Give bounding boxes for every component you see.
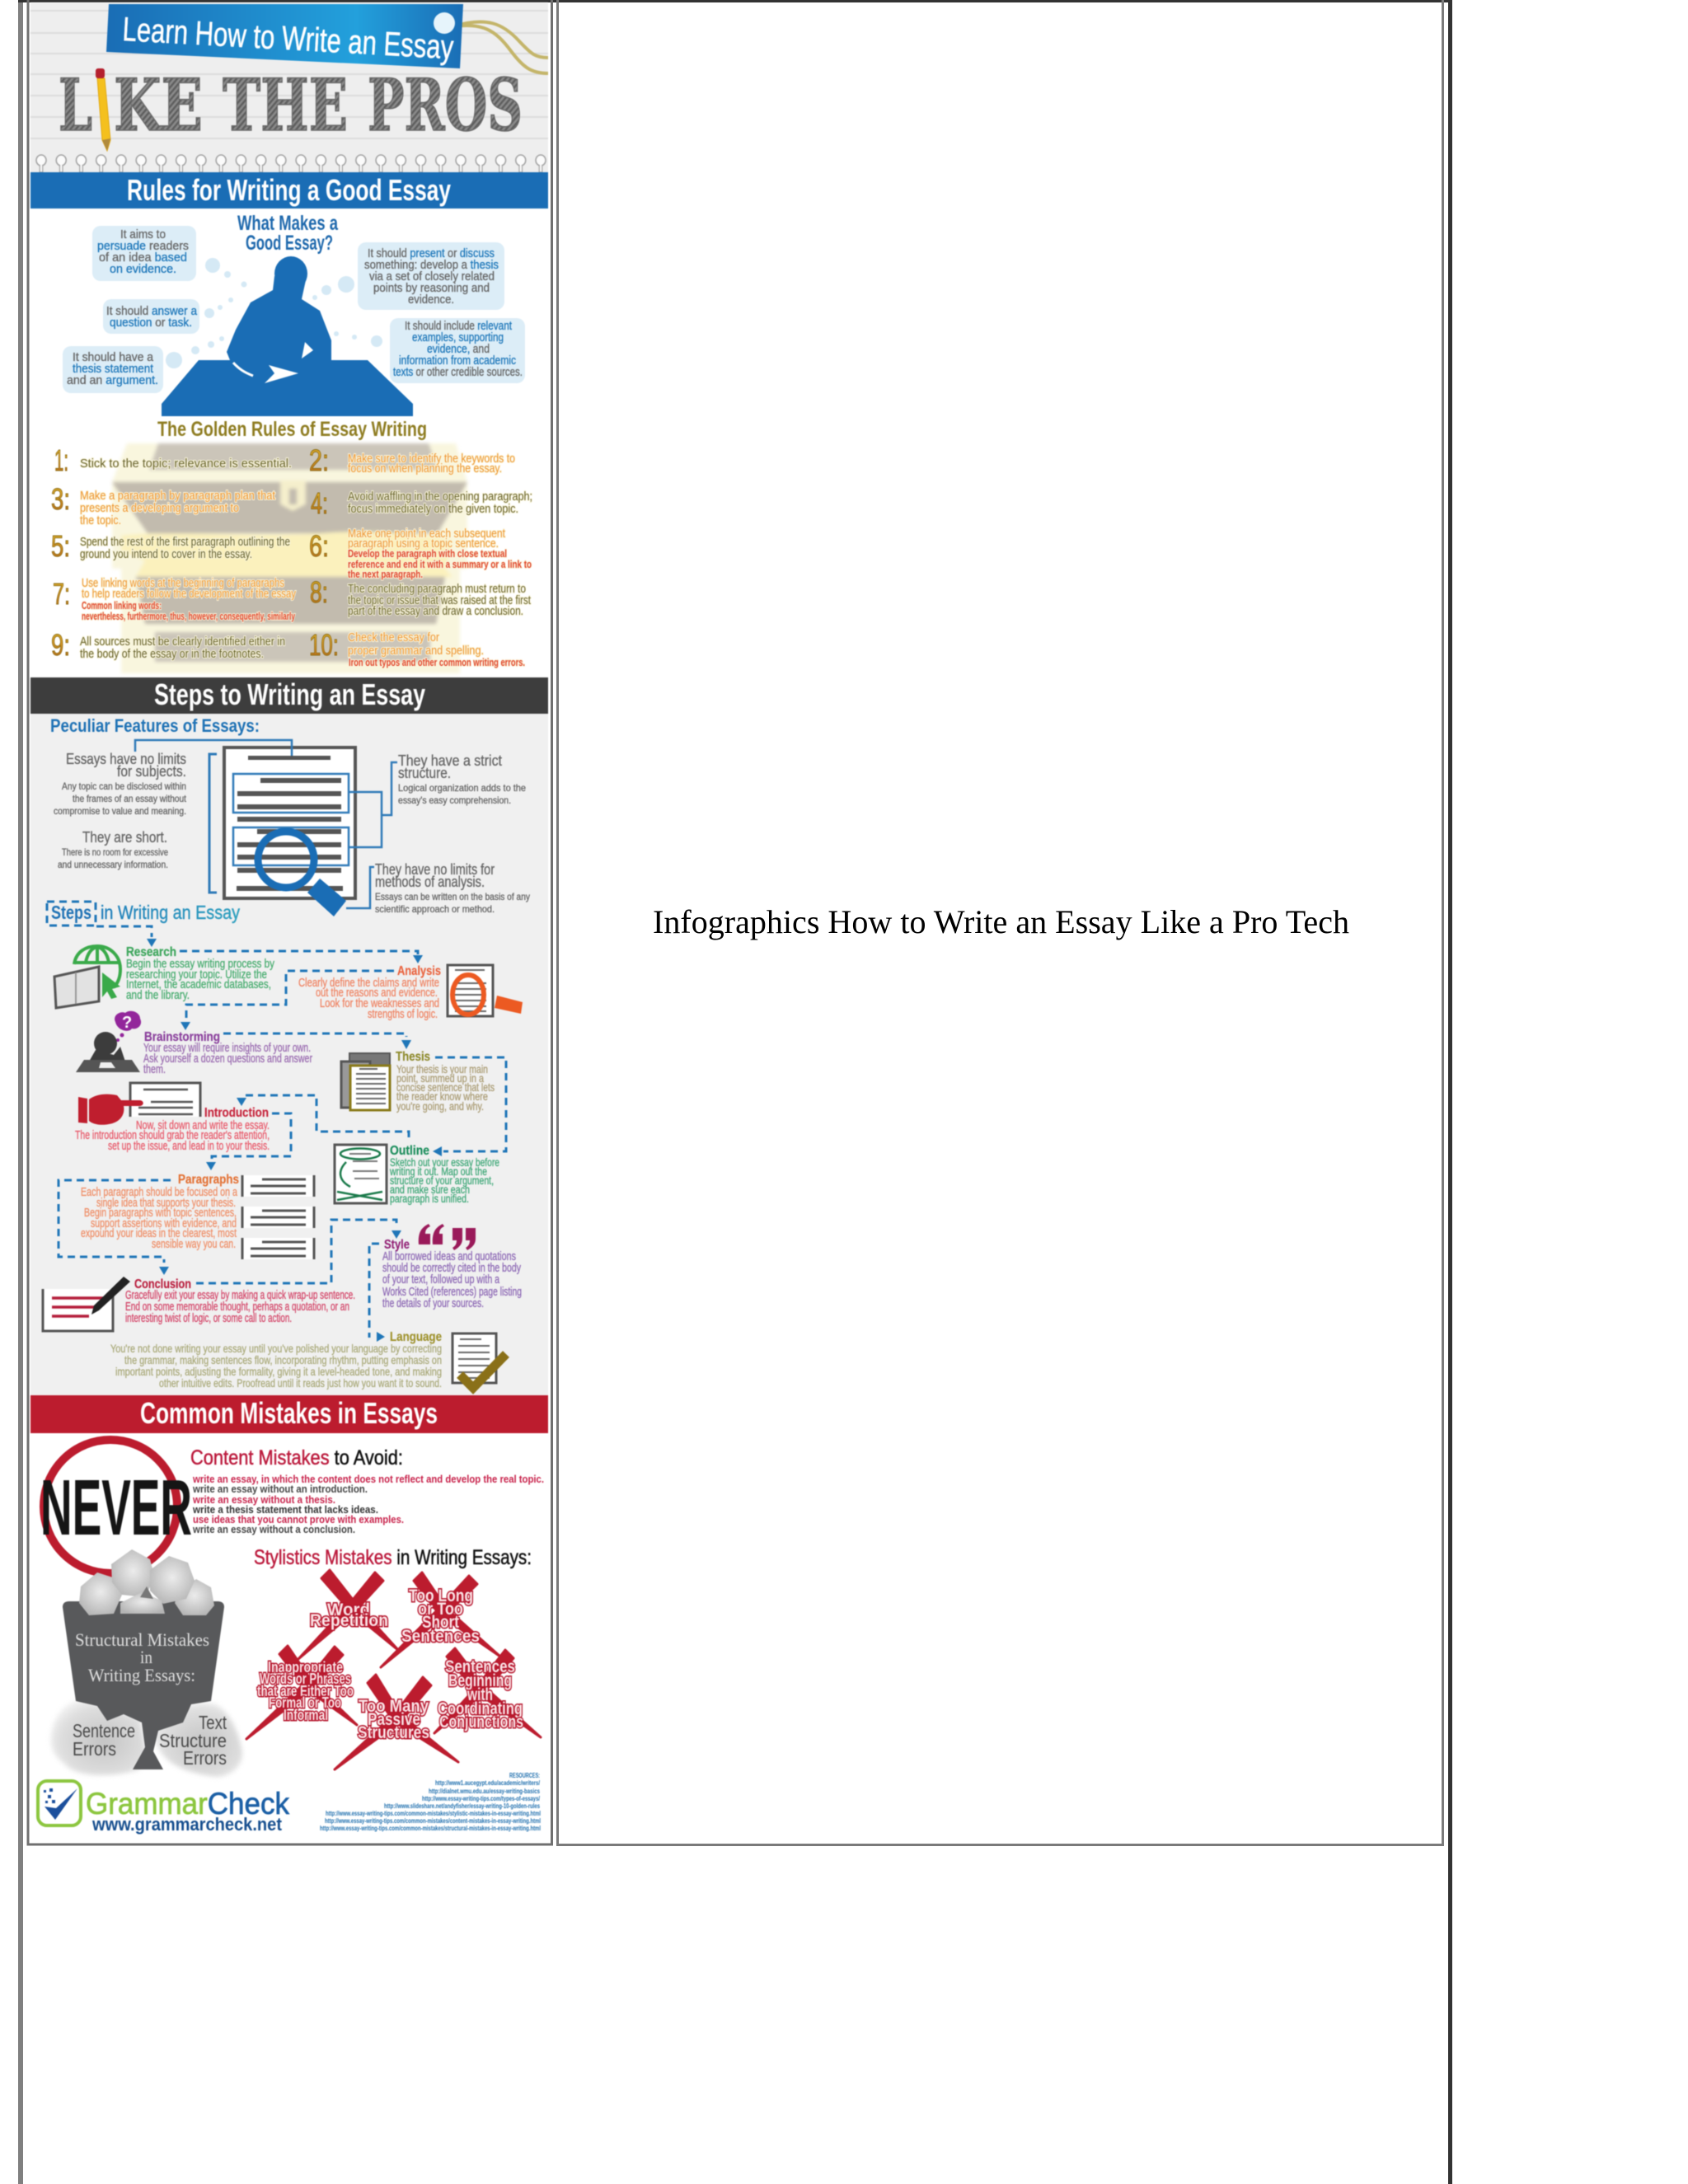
golden rule 7: 7: [53,577,70,611]
panel background: notebook header [30,2,548,172]
text: no limits for methods: methods of analysis. [375,874,485,890]
illustration: structural mistakes bucket: Sentence [73,1720,135,1741]
callout: persuade readers: on evidence. [110,262,176,276]
title: LIKE THE PROS: PROS [368,63,523,148]
step: brainstorming text: Brainstorming [144,1030,220,1044]
stylistic mistake: Inappropriate Words [246,1646,357,1739]
stylistic mistake: Word Repetition: Repetition [310,1611,388,1630]
spiral binding rings [31,154,548,172]
golden rule 8: 8: [310,575,328,609]
step: language text [110,1330,442,1390]
step: analysis text [298,964,441,1021]
stylistic mistake: Too Long or Too Short Sentences: Short [422,1613,459,1632]
arrows: dashed step flow [59,926,506,1342]
callout: thesis statement [63,346,163,393]
step: research text: Research [126,945,176,959]
golden rule 8: part of the essay and draw a conclusion. [348,604,523,618]
step: style text [382,1238,522,1310]
title tag: Learn How to Write an Essay [106,4,463,68]
callout: thesis statement: thesis statement [73,362,154,376]
stylistic mistake: Sentences Beginning with Coordinating Conjunctions: Coordinating [438,1699,523,1718]
step: conclusion text [125,1277,355,1325]
golden rule 7: Common linking words: [82,599,162,612]
step: thesis text: concise sentence that lets [396,1080,495,1094]
text: strict structure: Logical organization adds to the [398,782,526,794]
step: thesis text: Your thesis is your main [396,1062,488,1076]
resources list: http://www.slideshare.net/andyfisher/essay-writing-10-golden-rules [384,1802,540,1810]
golden rule 1 [54,443,292,477]
illustration: treasure chest background [112,443,467,673]
step: outline text: structure of your argument, [390,1174,494,1187]
heading: The Golden Rules of Essay Writing: The Golden Rules of Essay Writing [157,418,427,441]
golden rule 10 [309,628,525,668]
callout: relevant examples: It should include relevant [405,319,513,333]
icon: NEVER prohibition circle [40,1440,192,1573]
golden rule 7 [53,576,296,622]
logo: GrammarCheck: GrammarCheck [86,1787,289,1821]
golden rule 10: Iron out typos and other common writing errors. [349,656,525,668]
illustration: structural mistakes bucket: Structural Mistakes [75,1629,209,1650]
golden rule 5: Spend the rest of the first paragraph outlining the [80,535,290,549]
string of the tag [453,21,548,73]
step: paragraphs text: single idea that supports your thesis. [96,1196,236,1210]
title: LIKE THE PROS: L [59,63,92,148]
step: paragraphs text: Begin paragraphs with topic sentences, [84,1206,237,1220]
step: outline text [389,1144,499,1205]
title: LIKE THE PROS [59,63,523,148]
step: outline text: writing it out. Map out the [389,1165,487,1178]
resources list: http://dialnet.wmu.edu.au/essay-writing-basics [429,1788,540,1795]
step: introduction text: set up the issue, and lead in to your thesis. [108,1139,270,1153]
text: they are short [58,829,168,870]
stylistic mistake: Too Many Passive Structures: Passive [368,1710,420,1729]
step: thesis text: Thesis [396,1050,430,1064]
golden rule 3: the topic. [80,513,121,527]
text: no limits for subjects: Any topic can be disclosed within [62,780,186,792]
heading: What Makes a Good Essay?: What Makes a [237,212,339,235]
callout: persuade readers: persuade readers [97,239,189,253]
step: introduction text: The introduction should grab the reader's attention, [75,1128,270,1142]
resources list: http://www.essay-writing-tips.com/common-mistakes/stylistic-mistakes-in-essay-writing.html [326,1810,541,1817]
step: style text: the details of your sources. [382,1296,484,1310]
golden rule 2: 2: [309,443,329,477]
stylistic mistake: Too Long or Too Short Sentences [381,1572,500,1667]
text: no limits for methods: They have no limits for [375,861,495,878]
text: strict structure [398,752,526,806]
step: analysis text: Analysis [397,964,441,978]
stylistic mistake: Inappropriate Words: Inappropriate [268,1659,343,1675]
callout: answer a question [103,299,199,334]
title: LIKE THE PROS: KE [114,63,203,148]
text: strict structure: structure. [398,765,451,781]
stylistic mistake: Too Long or Too Short Sentences: Too Long [409,1586,473,1605]
golden rule 7: to help readers follow the development of the essay [82,587,296,601]
golden rule 2: focus on when planning the essay. [348,462,502,476]
text: no limits for subjects: Essays have no limits [66,751,186,767]
callout: thesis statement: It should have a [73,350,154,364]
step: brainstorming text: Your essay will require insights of your own. [143,1041,311,1055]
callout: relevant examples: information from academic [399,354,516,368]
resources list: http://www.essay-writing-tips.com/common-mistakes/content-mistakes-in-essay-writing.html [325,1817,541,1825]
heading: Content Mistakes to Avoid: Content Mistakes to Avoid: [190,1446,403,1469]
step: conclusion text: End on some memorable thought, perhaps a quotation, or an [125,1301,349,1314]
golden rule 10: Check the essay for [348,630,439,644]
callout: answer a question: It should answer a [106,304,198,318]
text: they are short: They are short. [82,829,167,846]
stylistic mistake: Sentences Beginning with Coordinating Conjunctions: Conjunctions [439,1713,523,1732]
section banner: Steps to Writing an Essay [30,677,548,714]
section background: steps [30,714,548,1395]
section banner: Steps to Writing an Essay: Steps to Writing an Essay [154,677,425,711]
step: conclusion text: interesting twist of logic, or some call to action. [125,1312,292,1325]
stylistic mistake: Inappropriate Words: that are Either Too [257,1683,354,1699]
heading: What Makes a Good Essay? [237,212,339,255]
list: content mistakes: write an essay without a thesis. [192,1493,335,1506]
golden rule 10: proper grammar and spelling. [348,644,484,658]
callout: present or discuss: something: develop a thesis [364,258,499,272]
step: brainstorming icon: ? [122,1014,132,1032]
step: introduction text: Now, sit down and write the essay. [136,1118,270,1132]
step: introduction text: Introduction [204,1106,269,1120]
illustration: essay document with magnifier [135,740,397,916]
list: content mistakes: write an essay without an introduction. [192,1483,368,1495]
golden rule 5: ground you intend to cover in the essay. [80,547,252,561]
step: paragraphs text: expound your ideas in the clearest, most [81,1226,237,1240]
step: language icon [452,1333,506,1388]
golden rule 1: 1: [54,443,68,477]
stylistic mistake: Sentences Beginning with Coordinating Conjunctions [434,1648,541,1737]
text: strict structure: essay's easy comprehension. [398,794,511,806]
step: analysis text: Clearly define the claims and write [298,976,439,990]
golden rule 3: presents a developing argument to [80,501,239,515]
golden rule 1: Stick to the topic; relevance is essential. [80,457,292,471]
step: research text: and the library. [126,988,190,1002]
callout: present or discuss: points by reasoning and [373,281,490,295]
golden rule 4: focus immediately on the given topic. [348,502,518,516]
text: no limits for methods [375,861,530,915]
golden rule 4: Avoid waffling in the opening paragraph; [348,490,532,504]
golden rule 6: the next paragraph. [348,568,423,580]
golden rule 6: Make one point in each subsequent [348,527,506,541]
stylistic mistake: Word Repetition [298,1570,399,1659]
golden rule 4 [311,486,532,520]
section banner: Common Mistakes in Essays: Common Mistakes in Essays [140,1396,438,1430]
step: paragraphs text: sensible way you can. [152,1237,236,1251]
icon: NEVER prohibition circle: NEVER [40,1464,192,1552]
golden rule 9: the body of the essay or in the footnotes. [80,647,264,661]
step: paragraphs text: Paragraphs [178,1173,239,1187]
step: research text [126,945,274,1002]
step: brainstorming text [143,1030,312,1076]
step: analysis text: Look for the weaknesses and [320,996,439,1010]
text: no limits for methods: Essays can be written on the basis of any [375,891,530,902]
step: analysis text: strengths of logic. [368,1007,438,1021]
step: conclusion text: Gracefully exit your essay by making a quick wrap-up sentence. [125,1289,355,1302]
golden rule 9 [51,628,285,662]
callout: present or discuss: It should present or discuss [368,246,495,260]
heading: Stylistics Mistakes in Writing Essays: Stylistics Mistakes in Writing Essays: [254,1546,532,1569]
step: brainstorming icon [76,1011,141,1072]
step: research text: Begin the essay writing process by [126,957,274,971]
callout: persuade readers: of an idea based [99,251,187,265]
golden rule 6: reference and end it with a summary or a link to [348,558,532,570]
text: they are short: and unnecessary information. [58,859,168,870]
callout: answer a question: question or task. [110,316,192,330]
text: no limits for subjects: for subjects. [117,763,186,780]
list: content mistakes: write an essay, in which the content does not reflect and develop the real topic. [192,1473,544,1485]
callout: thesis statement: and an argument. [67,373,158,387]
title: LIKE THE PROS: THE [223,63,348,148]
golden rule 9: All sources must be clearly identified either in [80,635,285,649]
stylistic mistake: Word Repetition: Word [327,1601,370,1619]
callout: persuade readers [92,226,196,281]
callout: relevant examples: texts or other credible sources. [393,365,523,379]
step: language text: You're not done writing your essay until you've polished your language by correcting [110,1342,442,1355]
heading: Peculiar Features of Essays: Peculiar Features of Essays: [50,715,260,736]
list: content mistakes [192,1473,544,1535]
heading: Steps in Writing an Essay: in Writing an Essay [101,902,240,923]
title tag: Learn How to Write an Essay: Learn How to Write an Essay [121,10,455,66]
step: analysis text: out the reasons and evidence. [316,986,438,1000]
step: paragraphs text [81,1173,239,1251]
resources list: http://www.essay-writing-tips.com/common-mistakes/structural-mistakes-in-essay-writing.html [320,1825,541,1832]
resources list: http://www.essay-writing-tips.com/types-of-essays/ [422,1795,541,1802]
step: brainstorming text: Ask yourself a dozen questions and answer [143,1052,312,1066]
golden rule 6: 6: [309,529,329,563]
text: no limits for methods: scientific approach or method. [375,903,495,915]
golden rule 6 [309,527,532,580]
step: thesis icon [341,1053,390,1110]
text: strict structure: They have a strict [398,752,502,769]
step: language text: the grammar, making sentences flow, incorporating rhythm, putting emphasis on [124,1353,442,1366]
step: research text: Internet, the academic databases, [126,977,271,991]
logo: GrammarCheck [38,1781,289,1835]
list: content mistakes: write a thesis statement that lacks ideas. [192,1503,378,1516]
illustration: structural mistakes bucket: Writing Essays: [88,1665,195,1685]
illustration: structural mistakes bucket [51,1549,242,1777]
step: style text: should be correctly cited in the body [382,1261,521,1275]
golden rule 3: 3: [51,482,70,516]
callout: present or discuss: evidence. [408,293,454,307]
golden rule 7: nevertheless, furthermore, thus, however, consequently, similarly [82,610,295,622]
illustration: structural mistakes bucket: Errors [73,1738,116,1760]
step: outline icon [335,1145,387,1203]
resources list [320,1772,541,1832]
step: conclusion text: Conclusion [134,1277,191,1291]
golden rule 3: Make a paragraph by paragraph plan that [80,489,276,503]
callout: present or discuss: via a set of closely related [369,269,495,284]
step: research text: researching your topic. Utilize the [126,968,267,982]
golden rule 8: The concluding paragraph must return to [348,582,526,596]
callout: relevant examples [390,318,525,383]
step: analysis icon [448,965,523,1016]
step: paragraphs text: support assertions with evidence, and [91,1216,237,1230]
golden rule 3 [51,482,276,527]
stylistic mistake: Too Long or Too Short Sentences: or Too [418,1600,463,1619]
list: content mistakes: write an essay without a conclusion. [192,1523,355,1535]
golden rule 6: Develop the paragraph with close textual [348,547,507,560]
step: thesis text: the reader know where [396,1090,488,1103]
illustration: student at desk [162,256,413,416]
text: they are short: There is no room for excessive [62,846,168,858]
golden rule 2: Make sure to identify the keywords to [348,452,515,466]
illustration: structural mistakes bucket: Text [199,1712,227,1733]
callout: relevant examples: examples, supporting [412,330,504,344]
list: content mistakes: use ideas that you cannot prove with examples. [193,1513,404,1526]
golden rule 5 [51,529,290,563]
stylistic mistake: Too Many Passive Structures [335,1675,458,1769]
step: thesis text: you're going, and why. [396,1099,484,1113]
stylistic mistake: Too Long or Too Short Sentences: Sentences [401,1627,480,1646]
step: outline text: paragraph is unified. [390,1192,469,1205]
step: language text: other intuitive edits. Proofread until it reads just how you want it to sound. [159,1376,442,1390]
callout: relevant examples: evidence, and [427,342,490,356]
golden rule 8 [310,575,532,618]
step: outline text: and make sure each [390,1183,470,1196]
section banner: Rules for Writing a Good Essay: Rules for Writing a Good Essay [127,173,451,207]
decorative thought bubbles [166,258,382,368]
step: research icon [54,946,120,1008]
page frame: left rule [18,0,23,2184]
step: introduction text [75,1106,270,1153]
step: style text: of your text, followed up with a [382,1272,499,1286]
stylistic mistake: Inappropriate Words: Words or Phrases [260,1671,351,1687]
step: language text: Language [390,1330,442,1344]
text: no limits for subjects [54,751,187,817]
resources list: http://www1.aucegypt.edu/academic/writers/ [435,1779,541,1787]
step: conclusion icon [43,1277,130,1331]
stylistic mistake: Inappropriate Words: Informal [284,1707,328,1723]
stylistic mistake: Sentences Beginning with Coordinating Conjunctions: with [467,1685,493,1704]
stylistic mistake: Sentences Beginning with Coordinating Conjunctions: Beginning [448,1671,512,1690]
resources list: RESOURCES: [509,1772,540,1779]
caption: Infographics How to Write an Essay Like a Pro Tech [653,903,1349,940]
golden rule 4: 4: [311,486,328,520]
stylistic mistake: Too Many Passive Structures: Structures [358,1723,429,1742]
golden rule 9: 9: [51,628,70,662]
callout: persuade readers: It aims to [120,227,166,241]
golden rule 8: the topic or issue that was raised at the first [348,593,532,607]
heading: Steps in Writing an Essay: Steps [51,902,91,923]
page frame: top rule [18,0,1452,2]
step: thesis text: point, summed up in a [396,1071,484,1085]
panel: infographic [30,2,548,1835]
step: thesis text [396,1050,495,1113]
step: style text: Style [384,1238,410,1252]
text: no limits for subjects: the frames of an essay without [73,793,187,804]
callout: present or discuss [358,242,504,310]
step: outline text: Sketch out your essay before [390,1155,499,1169]
illustration: structural mistakes bucket: in [140,1647,152,1667]
panel border: infographic [28,0,552,1844]
stylistic mistake: Too Many Passive Structures: Too Many [359,1697,429,1716]
step: style quotes icon [419,1224,476,1250]
heading: Steps in Writing an Essay [47,902,240,926]
golden rule 7: Use linking words at the beginning of paragraphs [82,576,284,590]
page frame: right rule [1448,0,1452,2184]
step: paragraphs text: Each paragraph should be focused on a [81,1185,237,1199]
step: outline text: Outline [390,1144,429,1158]
icon: pencil as letter I [96,68,110,151]
step: brainstorming text: them. [143,1062,166,1076]
step: style text: All borrowed ideas and quotations [382,1249,516,1263]
heading: What Makes a Good Essay?: Good Essay? [246,232,333,255]
step: paragraphs icon [242,1175,314,1259]
step: introduction icon [78,1083,200,1125]
step: style text: Works Cited (references) page listing [382,1285,522,1299]
golden rule 6: paragraph using a topic sentence. [348,537,499,551]
step: language text: important points, adjusting the formality, giving it a level-headed tone, and making [115,1365,442,1378]
illustration: structural mistakes bucket: Errors [183,1747,227,1769]
text: no limits for subjects: compromise to value and meaning. [54,805,186,817]
illustration: structural mistakes bucket: Structure [159,1730,227,1751]
golden rule 2 [309,443,515,477]
golden rule 5: 5: [51,529,70,563]
golden rule 10: 10: [309,628,339,662]
stylistic mistake: Inappropriate Words: Formal or Too [269,1694,341,1711]
stylistic mistake: Sentences Beginning with Coordinating Conjunctions: Sentences [445,1657,515,1676]
logo: GrammarCheck: www.grammarcheck.net [91,1814,283,1835]
panel: caption cell [557,0,1442,1844]
